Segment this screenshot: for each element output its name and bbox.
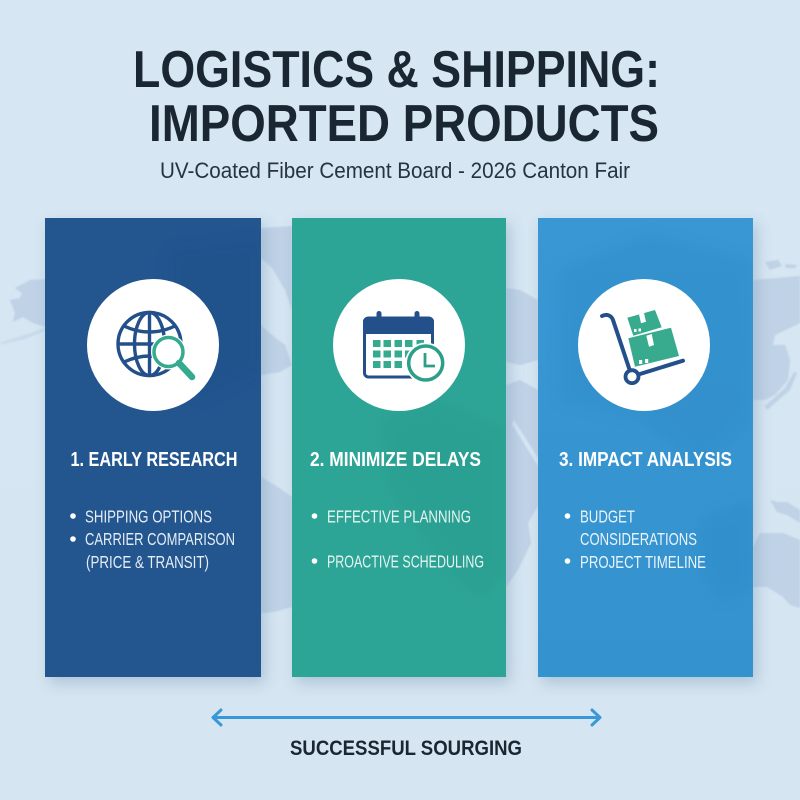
bullets: early research: SHIPPING OPTIONS [85, 506, 212, 526]
title: LOGISTICS & SHIPPING: [133, 41, 660, 99]
title [133, 41, 660, 153]
bullets: impact analysis [565, 506, 706, 572]
panel shadows [49, 224, 757, 683]
bullets: early research: CARRIER COMPARISON [85, 529, 235, 549]
world map background [0, 226, 800, 613]
panel: impact analysis [538, 218, 753, 677]
bullets: impact analysis: BUDGET [580, 506, 635, 526]
panel: early research [45, 218, 261, 677]
heading: early research: 1. EARLY RESEARCH [70, 448, 238, 471]
arrow: double-headed [213, 710, 600, 725]
icon: calendar with clock [333, 279, 465, 411]
bullets: minimize delays: EFFECTIVE PLANNING [327, 506, 471, 526]
heading: impact analysis: 3. IMPACT ANALYSIS [559, 448, 732, 471]
icon: hand truck with boxes [578, 279, 710, 411]
subtitle: UV-Coated Fiber Cement Board - 2026 Canton Fair [160, 158, 630, 183]
title: IMPORTED PRODUCTS [149, 95, 659, 153]
bullets: minimize delays [312, 506, 484, 572]
icon: globe with magnifier [87, 279, 219, 411]
bullets: impact analysis: CONSIDERATIONS [580, 529, 697, 549]
bullets: early research [70, 506, 235, 572]
bullets: early research: (PRICE & TRANSIT) [86, 552, 209, 572]
panel: minimize delays [292, 218, 506, 677]
label: successful sourcing: SUCCESSFUL SOURGING [290, 736, 522, 760]
heading: minimize delays: 2. MINIMIZE DELAYS [310, 448, 481, 471]
bullets: minimize delays: PROACTIVE SCHEDULING [327, 552, 484, 572]
bullets: impact analysis: PROJECT TIMELINE [580, 552, 706, 572]
